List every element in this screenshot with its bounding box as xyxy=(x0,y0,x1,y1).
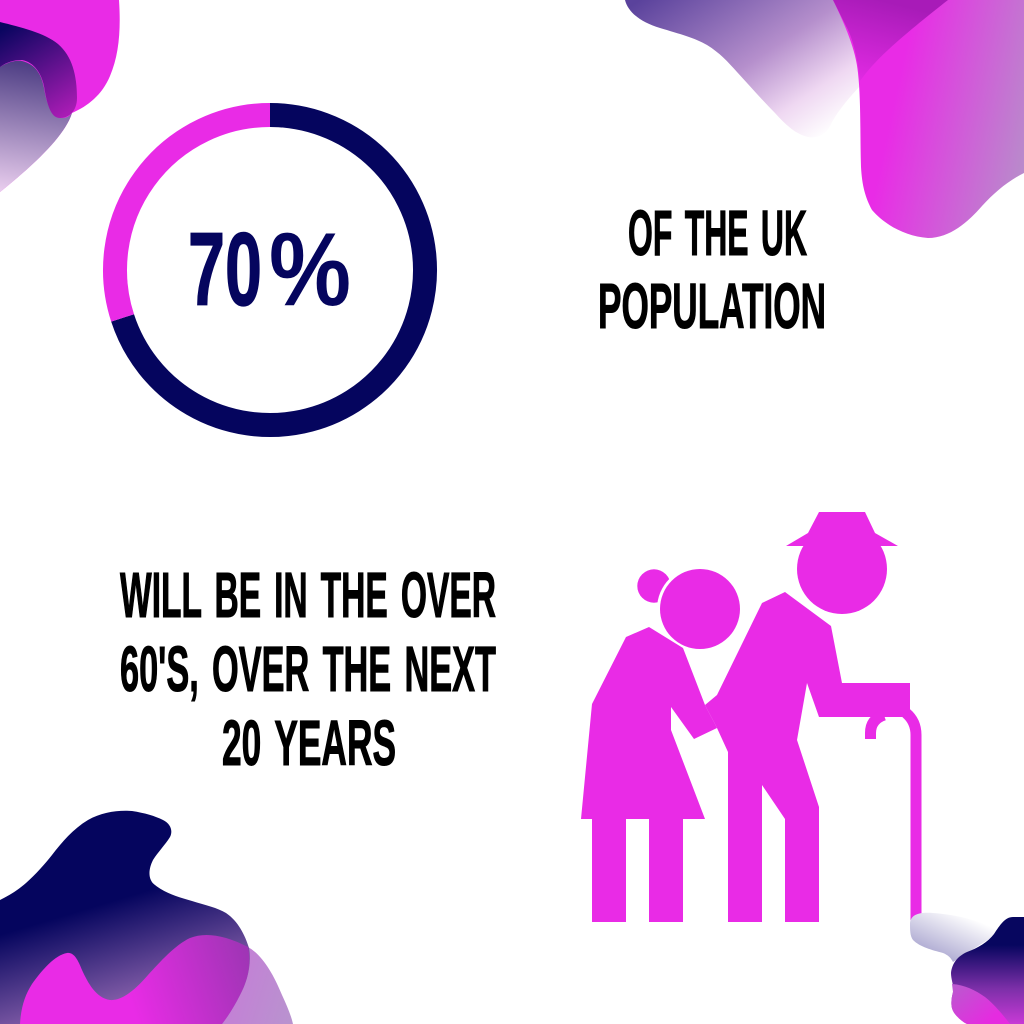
text block: of the UK population xyxy=(598,197,826,342)
decorative blob: bottom left xyxy=(0,811,293,1024)
woman: head xyxy=(660,569,740,649)
decorative blob: top left xyxy=(0,0,120,192)
woman: body and legs xyxy=(581,627,717,922)
donut ring: navy 70 percent segment xyxy=(123,115,425,425)
man: body, arm and legs xyxy=(705,592,910,922)
decorative blob: bottom right xyxy=(910,913,1024,1024)
icon: elderly couple with cane xyxy=(581,512,916,922)
cane xyxy=(870,713,916,922)
donut ring: pink 30 percent segment xyxy=(115,115,270,318)
donut value: 70 xyxy=(188,212,262,328)
text block: of the UK population: OF THE UK xyxy=(628,197,807,269)
woman: gap around head xyxy=(657,566,743,652)
decorative blob: top right xyxy=(625,0,1024,238)
text block: will be in the over 60's: 60'S, OVER THE NEXT xyxy=(120,633,496,705)
donut chart: 70 percent xyxy=(115,115,425,425)
man: head xyxy=(797,524,887,614)
text block: of the UK population: POPULATION xyxy=(598,270,826,342)
woman: bun xyxy=(637,569,671,603)
donut value: % xyxy=(269,212,351,328)
text block: will be in the over 60's xyxy=(120,559,496,779)
text block: will be in the over 60's: 20 YEARS xyxy=(222,707,396,779)
man: hat xyxy=(786,512,898,546)
text block: will be in the over 60's: WILL BE IN THE OVER xyxy=(120,559,496,631)
